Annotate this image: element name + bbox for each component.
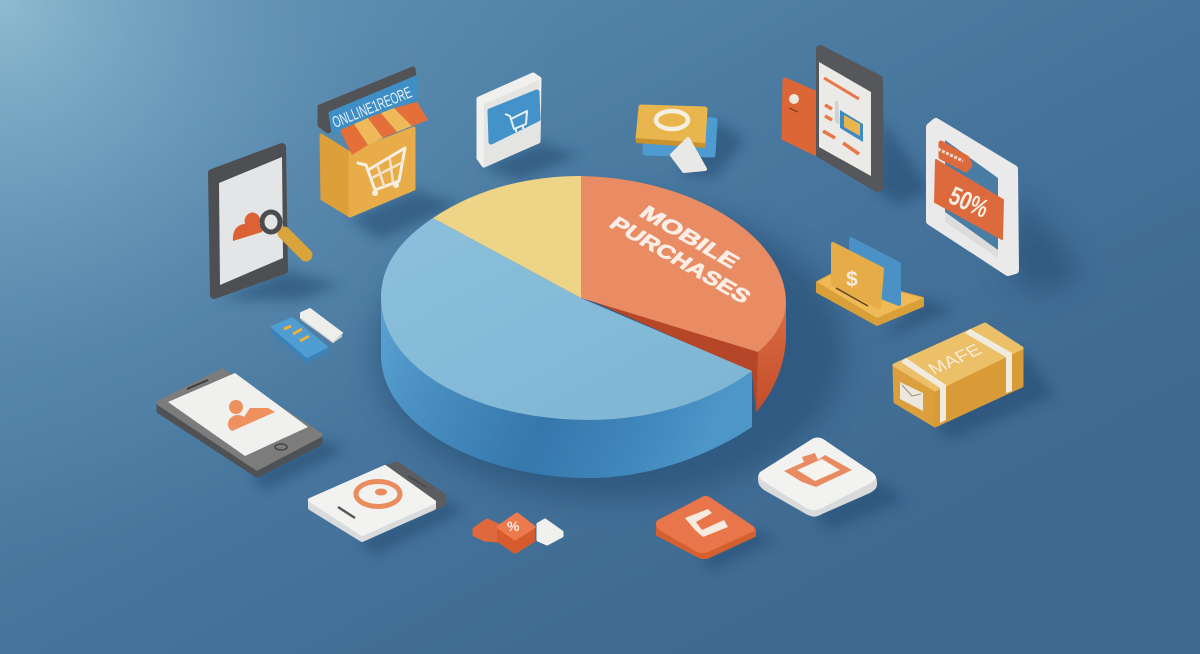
magnifier ring [262,212,280,232]
icon: cart card [479,75,540,167]
icon: yellow box with ring [636,107,715,171]
discount value: 50% [945,180,993,224]
icon: 50% discount frame [930,122,1015,272]
pie label: mobile purchases: PURCHASES [604,214,755,308]
icon: parcel box [894,324,1022,426]
icon: small white bar [301,309,342,343]
awning stripes [340,124,368,155]
discount tag [941,143,970,170]
icon: orange tile [656,496,755,558]
icon: payment card stand [817,239,923,325]
parcel envelope label [900,382,923,411]
cart [358,148,405,196]
icon: parcel box: MAFE [924,340,986,378]
pie label: mobile purchases: MOBILE [634,203,744,273]
pie slice: blue [381,218,752,420]
parcel straps [901,358,946,423]
profile icon [229,400,243,414]
icon: tablet with magnifier [212,147,306,295]
pie chart [381,176,786,478]
icon: white device with target [310,464,444,540]
icon: percent blocks: % [507,518,520,534]
pie side: orange wedge cut [590,300,758,412]
pie side: orange rim [756,303,786,412]
pie side: blue rim [381,298,752,478]
icon: white tile with orange mark [758,438,877,517]
icon: online store: ONLLINE1REORE [330,84,414,132]
magnifier handle [284,233,306,255]
target icon [356,482,400,506]
store sign [330,77,416,133]
icon: small blue tile [272,318,327,362]
pie slice: yellow [433,176,581,298]
pie slice: orange [581,176,786,352]
icon: percent blocks [474,514,562,553]
icon: tablet with product list [819,49,880,188]
pie label: mobile purchases [604,203,755,308]
icon: smartphone lying flat [159,371,320,475]
icon and pie shadows [220,120,1085,570]
icon: orange phone [784,80,815,153]
discount banner [935,160,1003,239]
icon: online store [320,69,428,216]
icon: payment card stand: $ [846,268,858,291]
